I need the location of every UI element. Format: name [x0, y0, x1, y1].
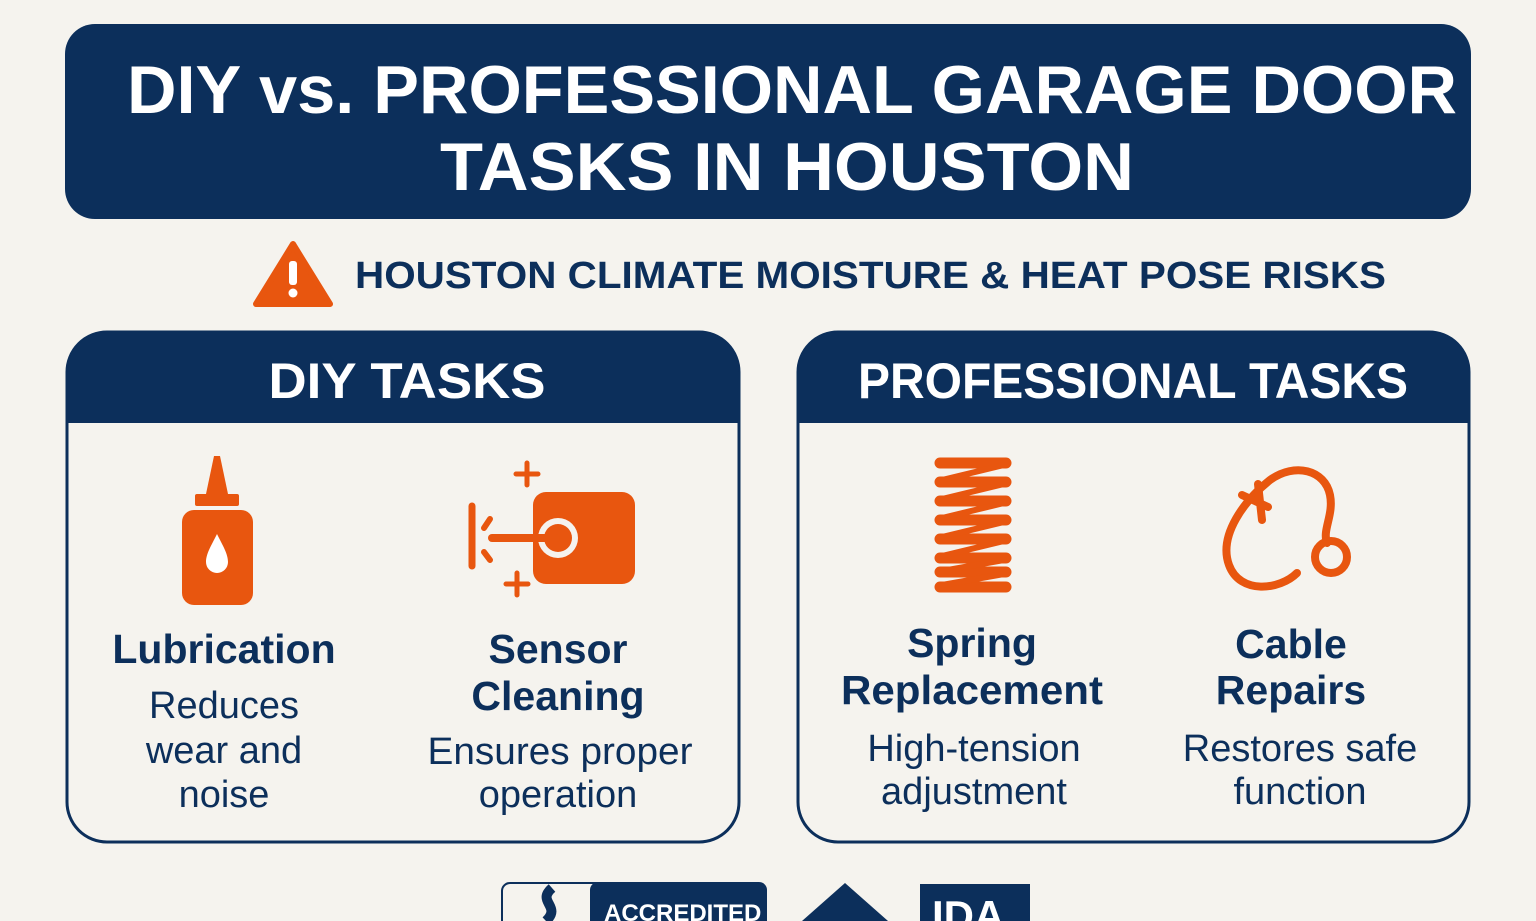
text: lubrication: Reduces	[149, 685, 299, 727]
text: lubrication: noise	[179, 774, 269, 816]
title banner: DIY vs. PROFESSIONAL GARAGE DOOR	[127, 52, 1457, 128]
icon: oil bottle	[182, 456, 253, 605]
text: sensor cleaning: Ensures proper	[428, 731, 693, 773]
text: cable repairs	[1183, 621, 1417, 813]
text: spring replacement: adjustment	[881, 771, 1067, 813]
icon: cable	[1226, 470, 1347, 587]
panel: DIY tasks	[67, 332, 739, 842]
text: lubrication: Lubrication	[112, 626, 336, 672]
subtitle warning: HOUSTON CLIMATE MOISTURE & HEAT POSE RISKS	[355, 255, 1386, 297]
text: spring replacement: Spring	[907, 620, 1037, 666]
text: lubrication	[112, 626, 336, 816]
heading: professional tasks: PROFESSIONAL TASKS	[858, 353, 1408, 409]
logo: BBB accredited	[502, 882, 767, 921]
text: sensor cleaning	[428, 626, 693, 816]
text: cable repairs: Repairs	[1216, 667, 1366, 713]
text: cable repairs: Cable	[1235, 621, 1347, 667]
icon: warning triangle	[256, 244, 330, 304]
text: spring replacement	[841, 620, 1103, 813]
text: cable repairs: function	[1233, 771, 1367, 813]
text: spring replacement: Replacement	[841, 667, 1103, 713]
icon: spring	[940, 463, 1006, 587]
title banner: TASKS IN HOUSTON	[440, 129, 1134, 205]
text: spring replacement: High-tension	[867, 728, 1081, 770]
text: sensor cleaning: Sensor	[488, 626, 628, 672]
text: lubrication: wear and	[145, 730, 302, 772]
title banner	[65, 24, 1471, 219]
text: cable repairs: Restores safe	[1183, 728, 1417, 770]
panel: professional tasks	[798, 332, 1469, 842]
icon: sensor	[472, 463, 635, 595]
logo: house	[802, 883, 888, 921]
heading: DIY tasks: DIY TASKS	[268, 353, 546, 409]
text: sensor cleaning: operation	[479, 774, 637, 816]
text: sensor cleaning: Cleaning	[471, 673, 645, 719]
logo: IDA	[920, 884, 1030, 921]
